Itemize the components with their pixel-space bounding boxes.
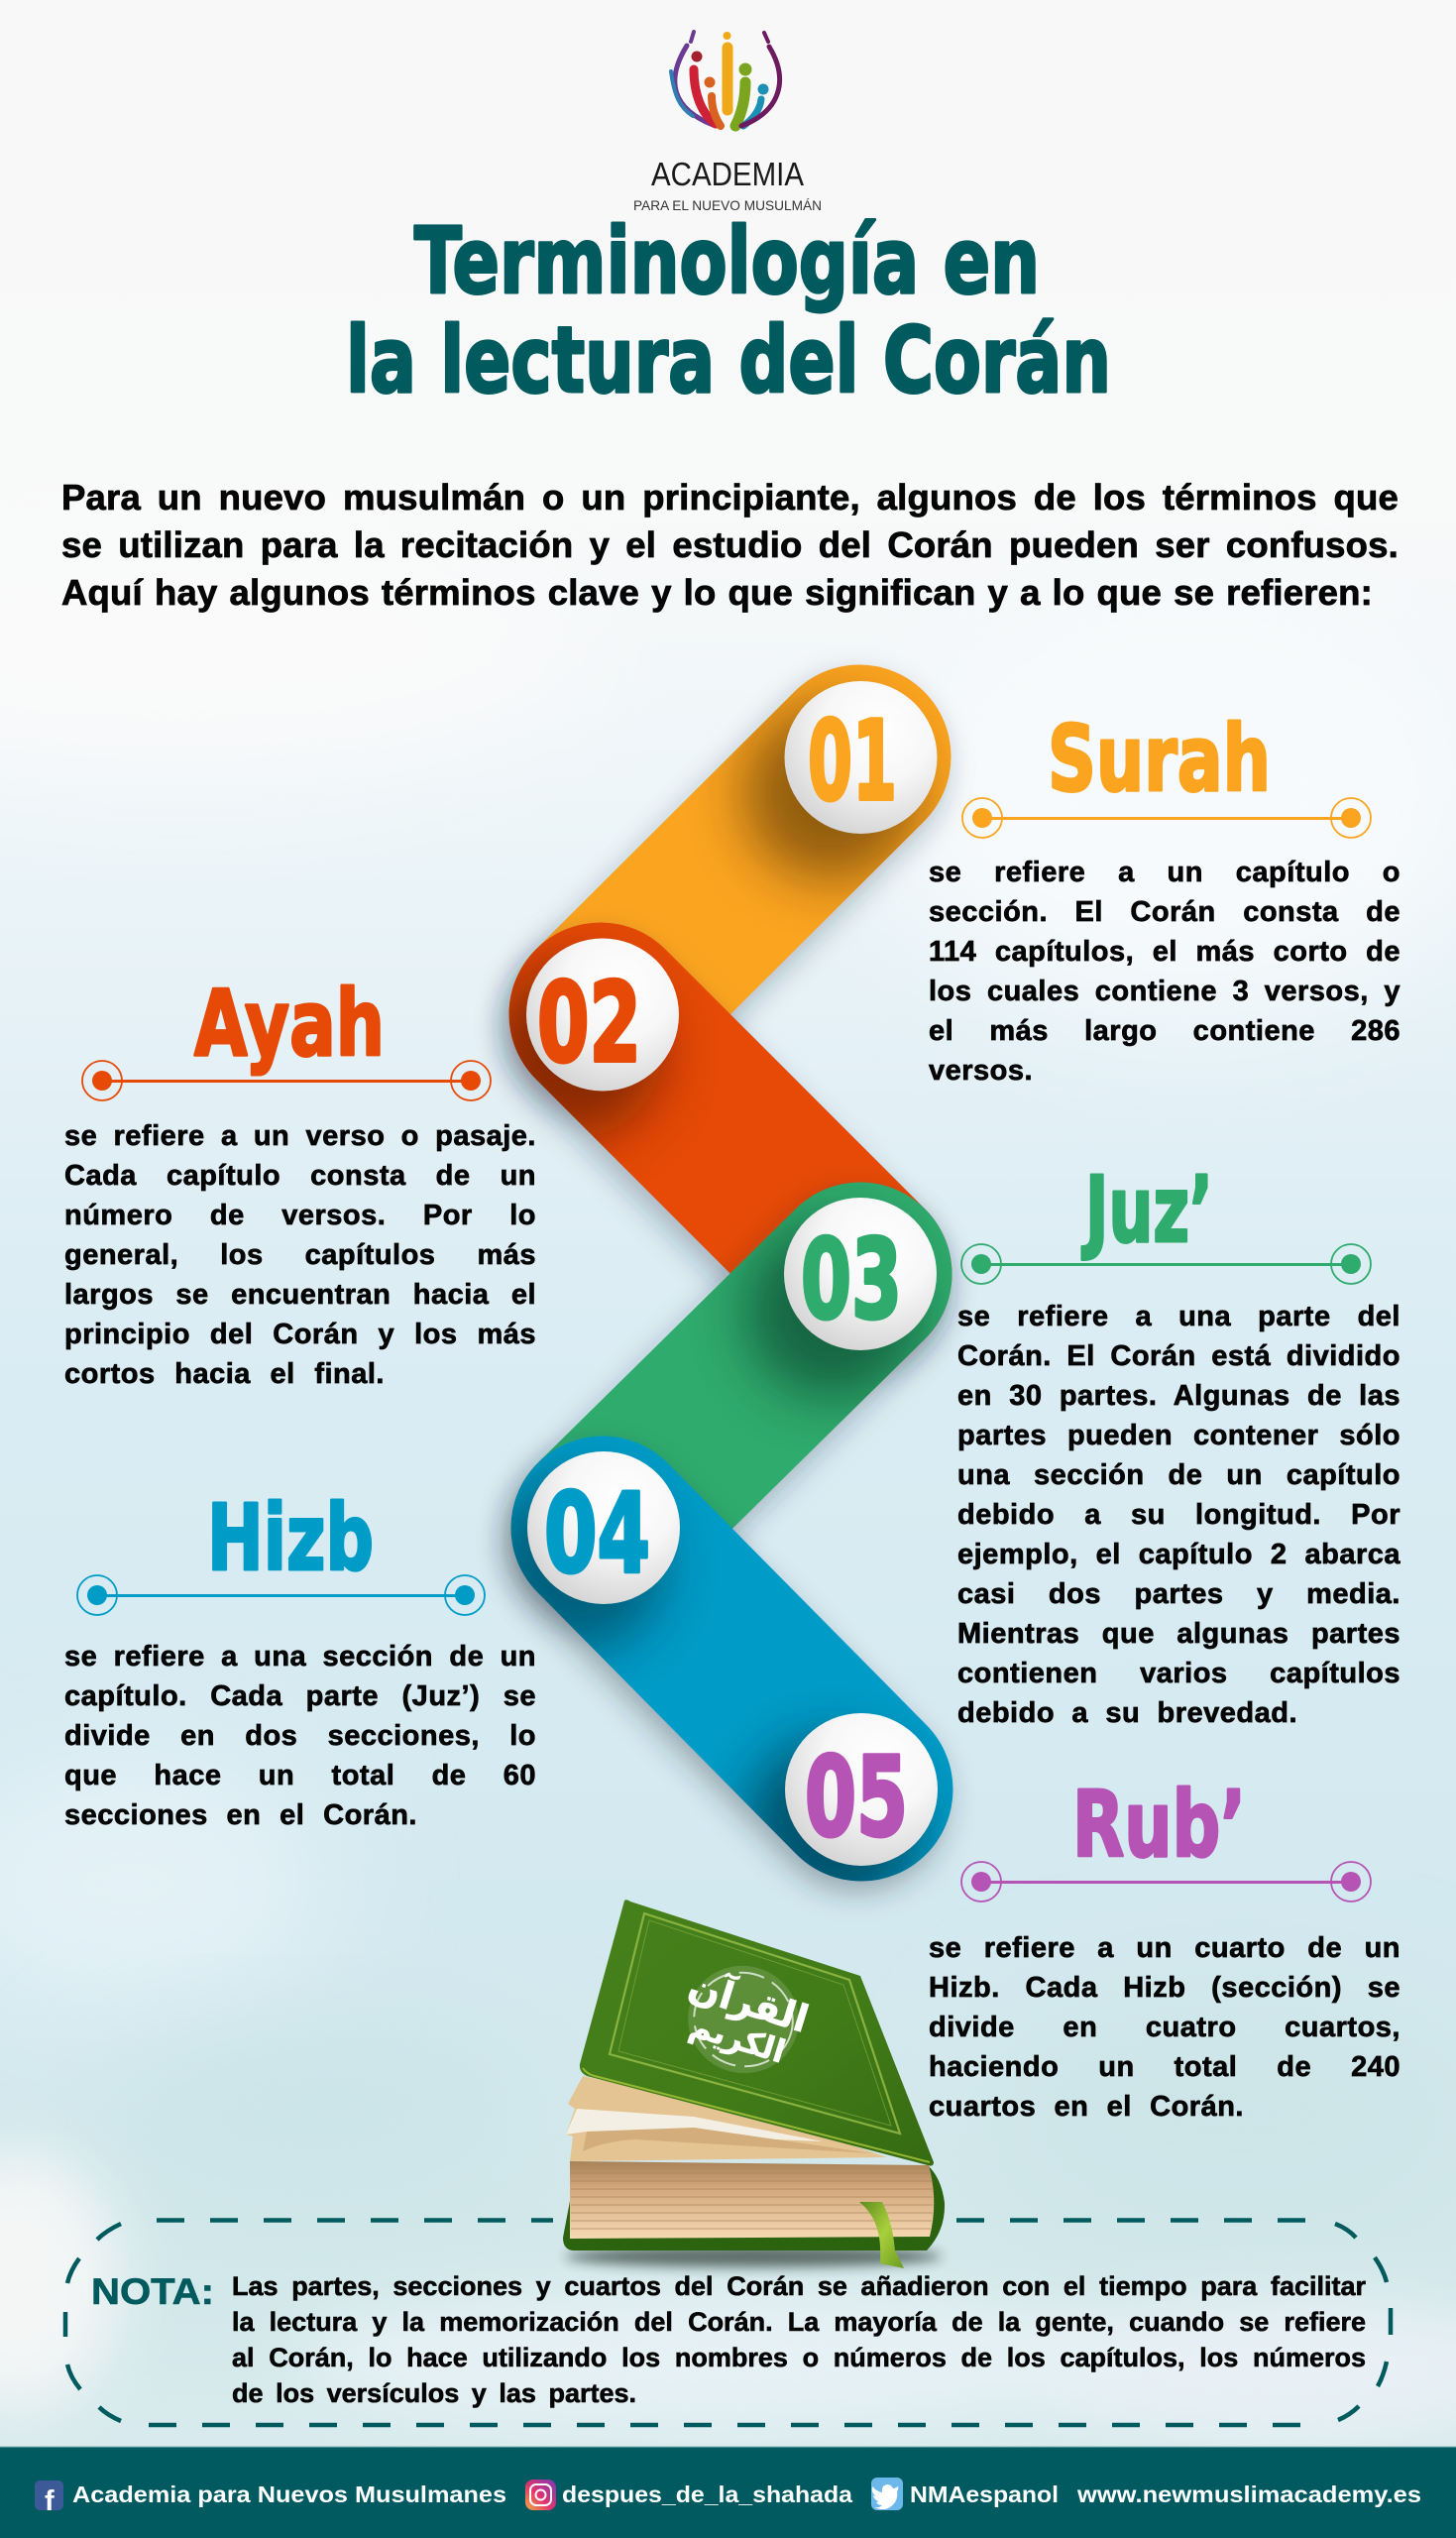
ribbon bookmark: [859, 2202, 904, 2268]
icon: colourful figures: [671, 32, 780, 126]
footer label: twitter: NMAespanol: [910, 2481, 1059, 2507]
note text: Las partes, secciones y cuartos del Corán se añadieron con el tiempo para facilitar: [232, 2271, 1366, 2301]
heading: Juz: [961, 1157, 1371, 1284]
text: Juz description: una sección de un capítulo: [957, 1459, 1400, 1491]
logo tagline: PARA EL NUEVO MUSULMÁN: [633, 197, 822, 213]
heading: Ayah: Ayah: [194, 971, 385, 1077]
number 03: 03: [801, 1216, 902, 1344]
zigzag ribbon diagram: [488, 681, 938, 1913]
text: Juz description: [957, 1301, 1401, 1729]
number 01: 01: [808, 698, 897, 826]
heading: Surah: [962, 706, 1371, 838]
text: Juz description: ejemplo, el capítulo 2 abarca: [957, 1539, 1400, 1570]
number 05: [785, 1713, 938, 1866]
heading: Ayah: [82, 971, 491, 1100]
text: Rub description: cuartos en el Corán.: [929, 2091, 1244, 2123]
footer label: facebook: Academia para Nuevos Musulmanes: [72, 2481, 506, 2507]
title: Terminología en: [414, 208, 1040, 314]
text: Ayah description: [64, 1120, 536, 1390]
number 05: 05: [805, 1734, 908, 1862]
number 01: [785, 681, 938, 834]
text: Rub description: divide en cuatro cuartos,: [929, 2012, 1400, 2043]
text: Ayah description: largos se encuentran hacia el: [64, 1279, 536, 1311]
text: Juz description: en 30 partes. Algunas de las: [957, 1380, 1400, 1412]
note text: [232, 2271, 1366, 2408]
loose pages: [566, 2076, 887, 2161]
emblem: calligraphy on the cover: [669, 1950, 818, 2089]
text: Juz description: partes pueden contener sólo: [957, 1420, 1400, 1451]
icon: facebook: f: [45, 2485, 55, 2517]
text: Hizb description: capítulo. Cada parte (Juz’) se: [64, 1680, 536, 1712]
heading: Rub: Rub’: [1072, 1772, 1246, 1878]
note dashed frame: [65, 2221, 1391, 2425]
text: Rub description: [929, 1932, 1400, 2123]
note label: NOTA:: [91, 2271, 214, 2312]
band 01: [596, 706, 918, 1026]
icon: facebook: [35, 2480, 63, 2517]
band 04 and 05: [490, 1477, 921, 1913]
text: Surah description: sección. El Corán consta de: [929, 896, 1400, 928]
heading: Surah: Surah: [1048, 706, 1271, 812]
heading: Rub: [961, 1772, 1371, 1902]
text: Juz description: contienen varios capítulos: [957, 1658, 1400, 1689]
text: Hizb description: divide en dos secciones, lo: [64, 1720, 536, 1752]
text: Juz description: Corán. El Corán está dividido: [957, 1340, 1400, 1372]
intro paragraph: [61, 477, 1399, 613]
band 03: [598, 1223, 920, 1540]
note text: la lectura y la memorización del Corán. La mayoría de la gente, cuando se refiere: [232, 2307, 1366, 2337]
text: Hizb description: que hace un total de 60: [64, 1760, 536, 1791]
text: Rub description: haciendo un total de 240: [929, 2051, 1400, 2083]
logo: Academia: [633, 32, 822, 213]
heading: Hizb: [77, 1485, 485, 1615]
emblem: calligraphy on the cover: القرآن: [684, 1962, 814, 2041]
text: Surah description: 114 capítulos, el más corto de: [929, 936, 1400, 968]
text: Rub description: se refiere a un cuarto de un: [929, 1932, 1400, 1964]
text: Hizb description: [64, 1641, 536, 1831]
text: Hizb description: se refiere a una sección de un: [64, 1641, 536, 1673]
text: Rub description: Hizb. Cada Hizb (sección) se: [929, 1972, 1400, 2004]
band 02: [488, 964, 860, 1286]
text: Surah description: se refiere a un capítulo o: [929, 857, 1400, 888]
text: Juz description: Mientras que algunas partes: [957, 1618, 1400, 1650]
text: Ayah description: Cada capítulo consta de un: [64, 1160, 536, 1192]
intro paragraph: Para un nuevo musulmán o un principiante, algunos de los términos que: [61, 477, 1399, 518]
footer bar: [0, 2446, 1456, 2538]
text: Juz description: debido a su longitud. Por: [957, 1499, 1400, 1531]
intro paragraph: se utilizan para la recitación y el estudio del Corán pueden ser confusos.: [61, 524, 1399, 565]
text: Ayah description: se refiere a un verso o pasaje.: [64, 1120, 536, 1152]
icon: instagram: [525, 2480, 556, 2510]
footer label: website: www.newmuslimacademy.es: [1076, 2481, 1421, 2507]
icon: twitter: [871, 2478, 903, 2510]
heading: Juz: Juz’: [1081, 1157, 1213, 1263]
back cover and spine: [563, 2166, 945, 2250]
title: [346, 208, 1111, 413]
page block: [570, 2161, 934, 2239]
intro paragraph: Aquí hay algunos términos clave y lo que significan y a lo que se refieren:: [61, 572, 1373, 613]
emblem: calligraphy on the cover: الكريم: [685, 2007, 790, 2071]
text: Hizb description: secciones en el Corán.: [64, 1799, 417, 1831]
icon: green Quran book: [563, 1900, 945, 2268]
title: la lectura del Corán: [346, 307, 1111, 413]
logo wordmark: ACADEMIA: [651, 156, 804, 192]
number 03: [784, 1198, 937, 1350]
text: Ayah description: general, los capítulos más: [64, 1239, 536, 1271]
front cover: [580, 1900, 934, 2166]
text: Surah description: los cuales contiene 3 versos, y: [929, 976, 1400, 1007]
number 04: [527, 1451, 680, 1604]
footer label: instagram: despues_de_la_shahada: [562, 2481, 852, 2507]
text: Ayah description: número de versos. Por lo: [64, 1200, 536, 1231]
text: Juz description: se refiere a una parte del: [957, 1301, 1400, 1332]
text: Juz description: casi dos partes y media.: [957, 1578, 1400, 1610]
number 02: 02: [537, 960, 641, 1088]
text: Surah description: [928, 857, 1400, 1087]
text: Surah description: versos.: [929, 1055, 1033, 1087]
book shadow: [565, 2246, 942, 2267]
note text: al Corán, lo hace utilizando los nombres o números de los capítulos, los números: [232, 2343, 1366, 2372]
text: Juz description: debido a su brevedad.: [957, 1697, 1297, 1729]
heading: Hizb: Hizb: [207, 1485, 374, 1591]
text: Ayah description: principio del Corán y los más: [64, 1319, 536, 1350]
note text: de los versículos y las partes.: [232, 2378, 636, 2408]
text: Surah description: el más largo contiene 286: [929, 1015, 1400, 1047]
number 04: 04: [544, 1470, 650, 1598]
text: Ayah description: cortos hacia el final.: [64, 1358, 385, 1390]
